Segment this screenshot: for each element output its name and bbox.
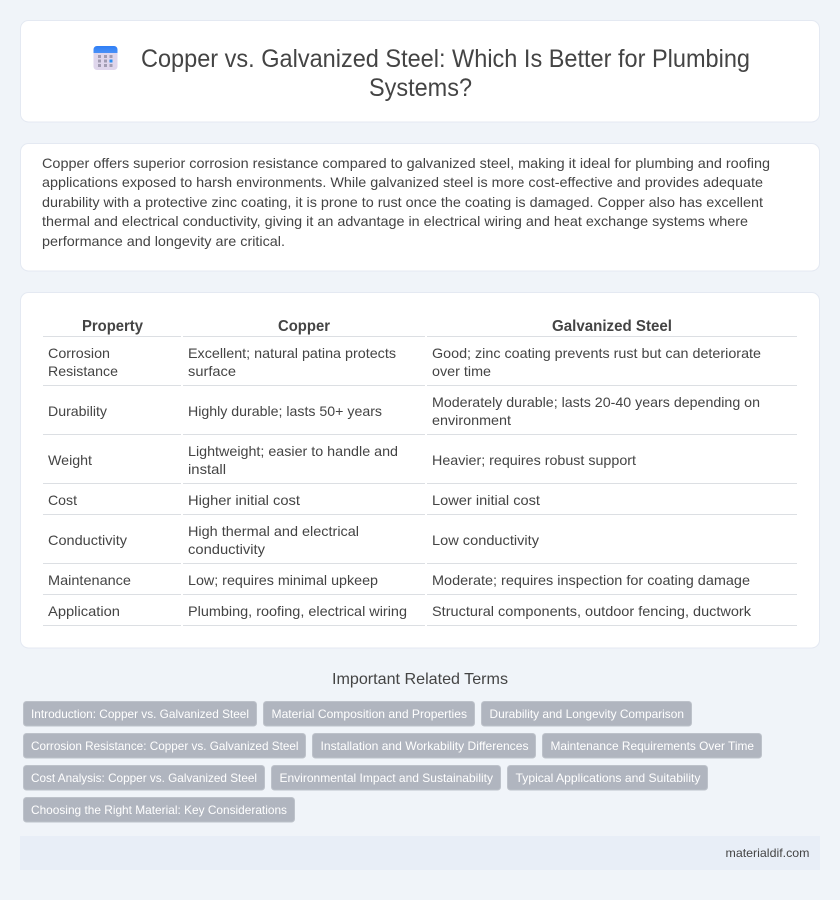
- table row: application: Application: [48, 603, 120, 619]
- tag: maintenance: Maintenance Requirements Over Time: [550, 739, 754, 753]
- table row: durability: [43, 394, 797, 434]
- text block: introduction paragraph: durability with a protective zinc coating, it is prone to rust once the coating is damaged. Copper also has excellent: [42, 194, 763, 210]
- text block: introduction paragraph: thermal and electrical conductivity, giving it an advantage in electrical wiring and heat exchange systems where: [42, 213, 748, 229]
- text block: introduction paragraph: performance and longevity are critical.: [42, 233, 285, 249]
- table row: weight: Lightweight; easier to handle and: [188, 443, 398, 459]
- table row: cost: Higher initial cost: [188, 492, 300, 508]
- footer: materialdif.com: [726, 846, 810, 860]
- icon: calendar: [94, 46, 118, 70]
- table row: weight: Weight: [48, 452, 92, 468]
- table row: corrosion resistance: Corrosion: [48, 345, 110, 361]
- tag: installation: [312, 734, 536, 758]
- panel: comparison table: [20, 292, 820, 648]
- tag: typical applications: Typical Applications and Suitability: [516, 771, 700, 785]
- table row: durability: Highly durable; lasts 50+ years: [188, 403, 382, 419]
- tag: cost analysis: Cost Analysis: Copper vs. Galvanized Steel: [31, 771, 257, 785]
- tag: corrosion resistance: Corrosion Resistance: Copper vs. Galvanized Steel: [31, 739, 298, 753]
- text block: introduction paragraph: applications exposed to harsh environments. While galvanized steel is more cost-effective and provides adequate: [42, 174, 763, 190]
- table row: cost: Cost: [48, 492, 77, 508]
- table row: corrosion resistance: Excellent; natural patina protects: [188, 345, 396, 361]
- table row: maintenance: [43, 572, 797, 594]
- tag: corrosion resistance: [24, 734, 306, 758]
- table row: conductivity: Conductivity: [48, 532, 127, 548]
- table row: cost: Lower initial cost: [432, 492, 540, 508]
- tag: choosing the right material: Choosing the Right Material: Key Considerations: [31, 803, 287, 817]
- title: [141, 45, 750, 102]
- tag: cost analysis: [24, 766, 264, 790]
- tag: introduction: [24, 702, 256, 726]
- tag: typical applications: [508, 766, 708, 790]
- table row: weight: Heavier; requires robust support: [432, 452, 636, 468]
- tag: environmental impact: Environmental Impact and Sustainability: [280, 771, 493, 785]
- table row: conductivity: Low conductivity: [432, 532, 539, 548]
- table header row: Property: [82, 318, 143, 335]
- table row: conductivity: [43, 523, 797, 564]
- panel: header: [20, 20, 820, 122]
- table row: corrosion resistance: over time: [432, 363, 491, 379]
- table row: conductivity: conductivity: [188, 541, 265, 557]
- table row: maintenance: Moderate; requires inspection for coating damage: [432, 572, 750, 588]
- table row: application: Plumbing, roofing, electrical wiring: [188, 603, 407, 619]
- table header row: Copper: [278, 318, 330, 335]
- tag: material composition: Material Composition and Properties: [272, 707, 467, 721]
- table row: maintenance: Maintenance: [48, 572, 131, 588]
- table header row: [43, 318, 797, 336]
- table row: cost: [43, 492, 797, 514]
- tag: durability: Durability and Longevity Comparison: [490, 707, 684, 721]
- footer: [20, 836, 820, 870]
- table row: durability: Durability: [48, 403, 107, 419]
- title: Systems?: [369, 74, 472, 102]
- tag: installation: Installation and Workability Differences: [320, 739, 528, 753]
- table row: weight: [43, 443, 797, 484]
- table header row: Galvanized Steel: [552, 318, 672, 335]
- table row: corrosion resistance: Good; zinc coating prevents rust but can deteriorate: [432, 345, 761, 361]
- table row: weight: install: [188, 461, 226, 477]
- tag list: related terms: [24, 702, 762, 822]
- table row: corrosion resistance: [43, 345, 797, 386]
- table row: durability: environment: [432, 412, 511, 428]
- panel: introduction: [20, 144, 820, 271]
- table row: conductivity: High thermal and electrical: [188, 523, 359, 539]
- table row: application: [43, 603, 797, 626]
- title: Copper vs. Galvanized Steel: Which Is Better for Plumbing: [141, 45, 750, 73]
- text block: introduction paragraph: [42, 155, 770, 249]
- tag: durability: [482, 702, 692, 726]
- table row: maintenance: Low; requires minimal upkeep: [188, 572, 378, 588]
- table row: corrosion resistance: surface: [188, 363, 236, 379]
- tag: environmental impact: [272, 766, 500, 790]
- table row: corrosion resistance: Resistance: [48, 363, 118, 379]
- heading: important related terms: Important Related Terms: [332, 671, 508, 688]
- tag: introduction: Introduction: Copper vs. Galvanized Steel: [31, 707, 249, 721]
- table row: durability: Moderately durable; lasts 20-40 years depending on: [432, 394, 760, 410]
- table row: application: Structural components, outdoor fencing, ductwork: [432, 603, 752, 619]
- text block: introduction paragraph: Copper offers superior corrosion resistance compared to galvanized steel, making it ideal for plumbing and roofing: [42, 155, 770, 171]
- tag: choosing the right material: [24, 798, 294, 822]
- tag: material composition: [264, 702, 474, 726]
- tag: maintenance: [542, 734, 762, 758]
